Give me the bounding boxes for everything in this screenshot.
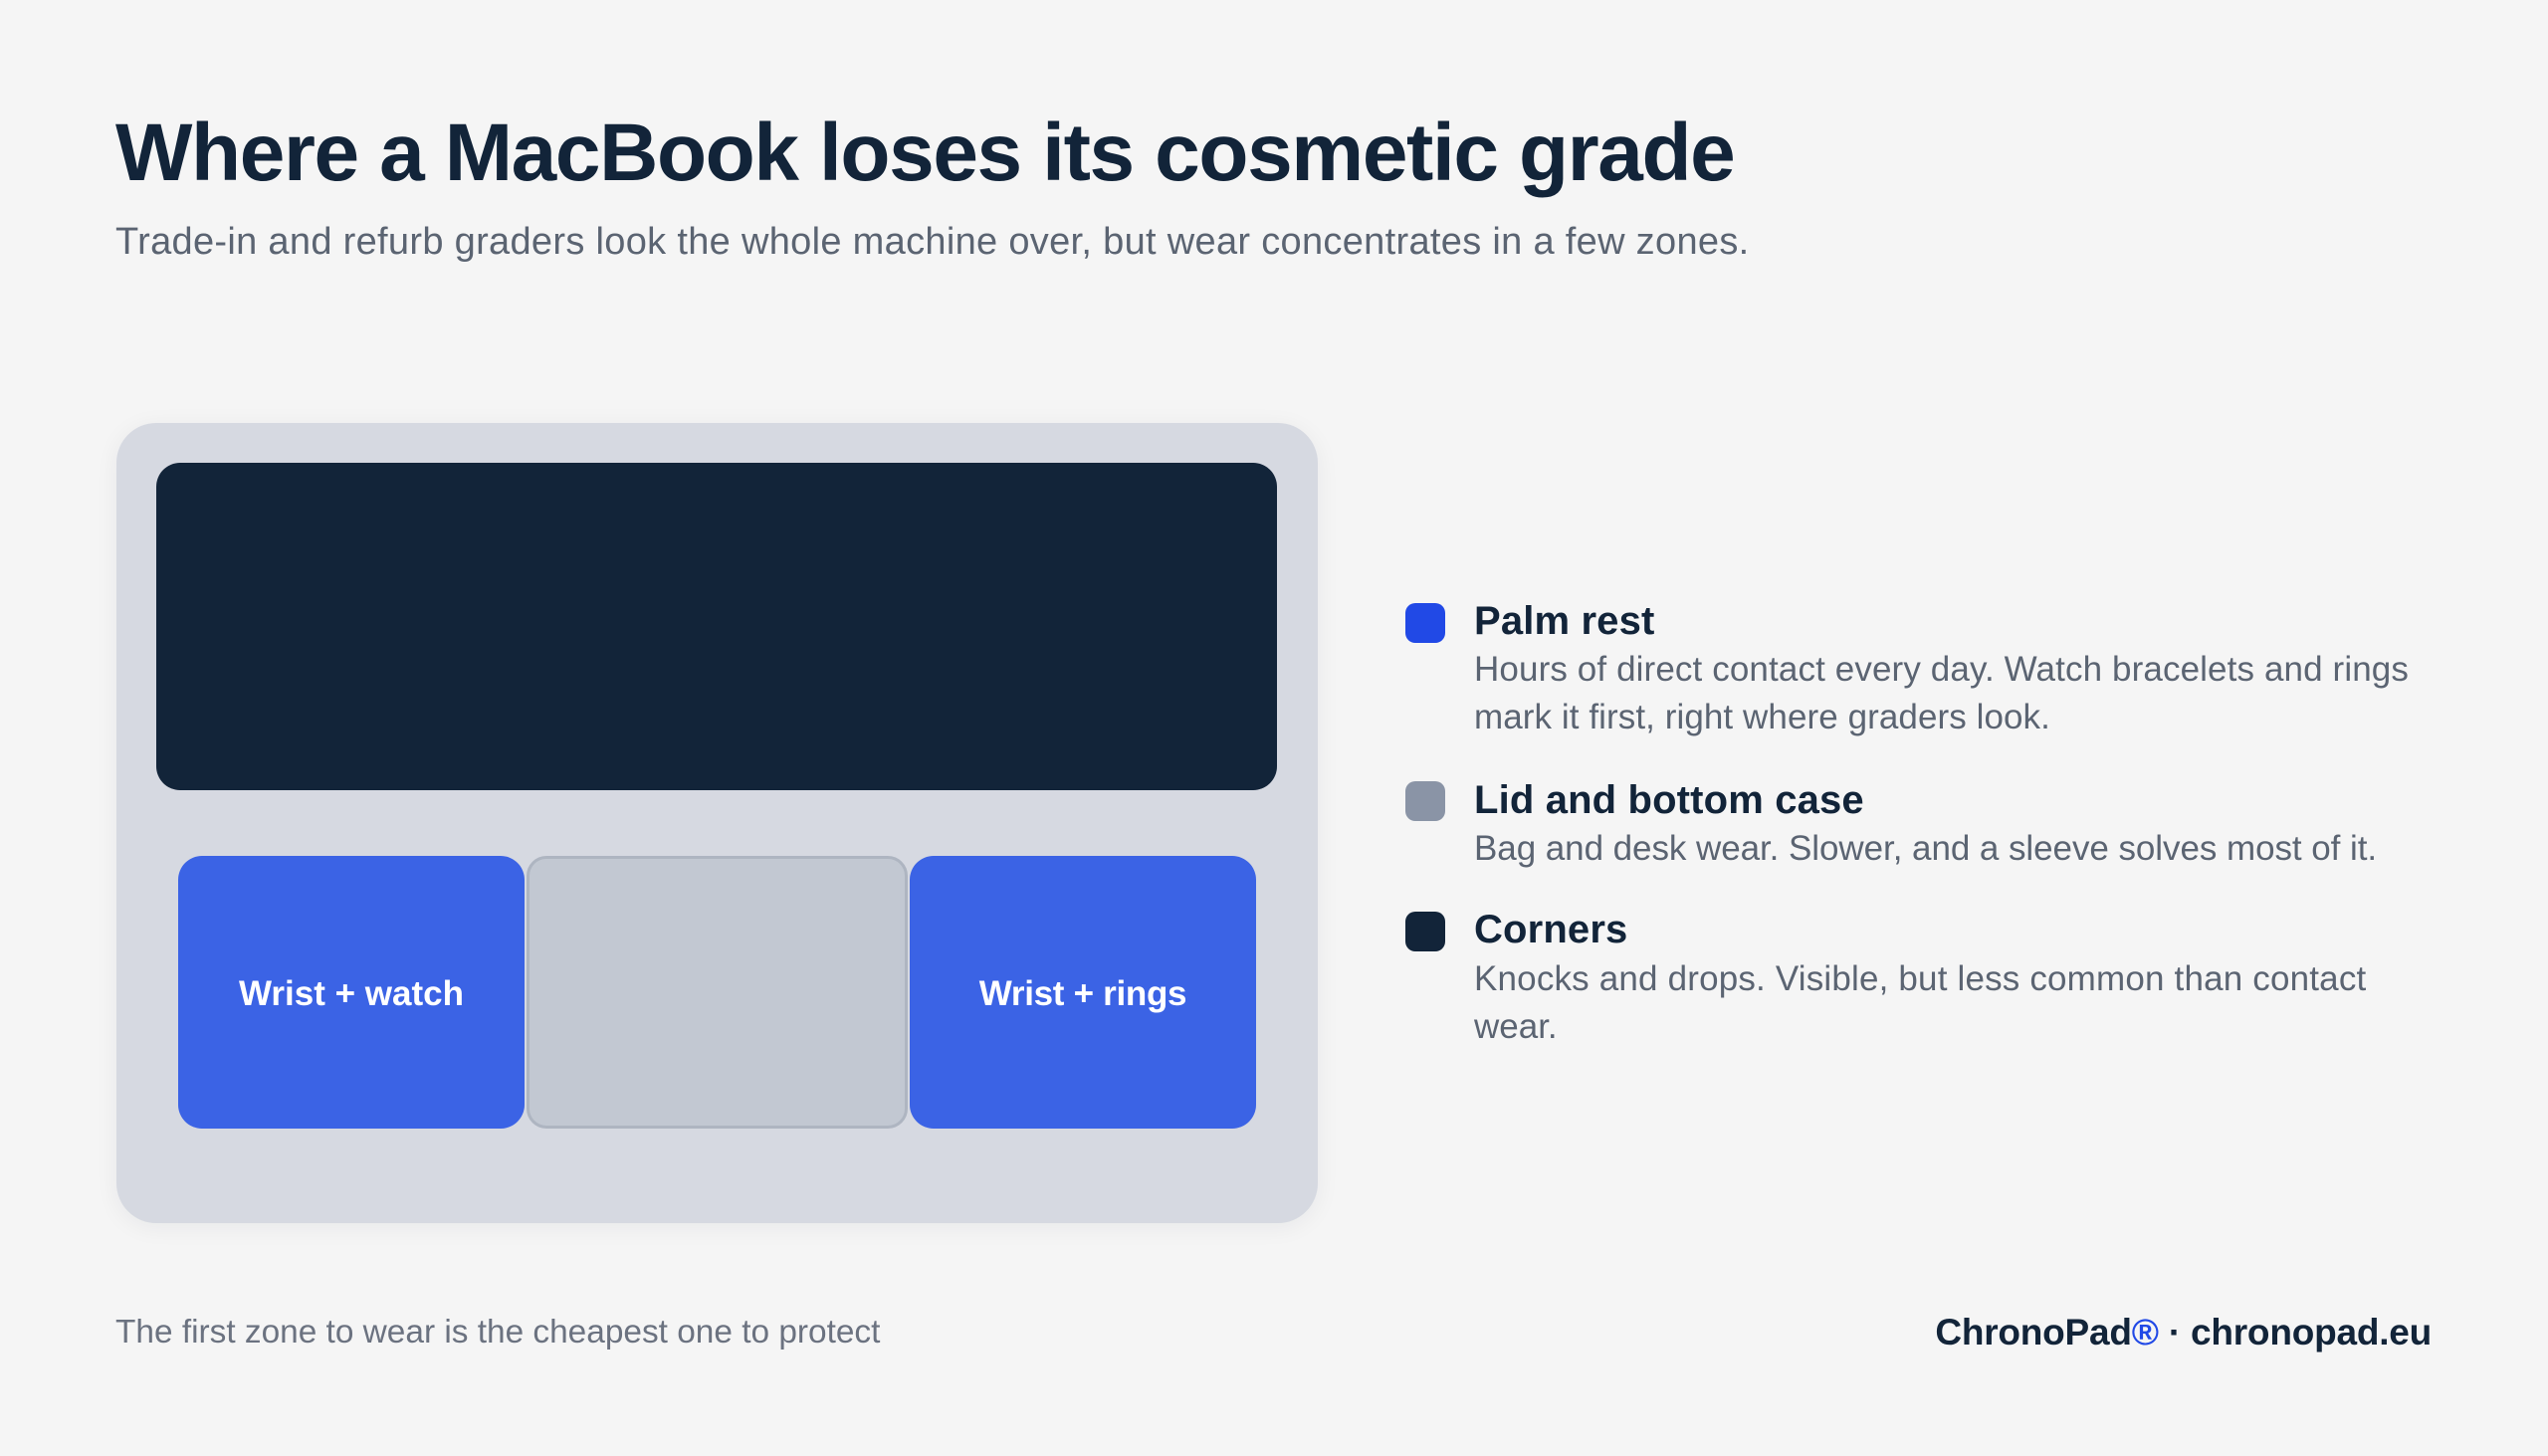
legend icon: lid and bottom case swatch [1405, 781, 1445, 821]
legend text: corners [1474, 959, 2366, 1046]
legend text: corners: Knocks and drops. Visible, but less common than contact [1474, 959, 2366, 998]
legend heading: corners: Corners [1474, 908, 1627, 951]
legend heading: lid and bottom case: Lid and bottom case [1474, 778, 1864, 822]
title: Where a MacBook loses its cosmetic grade [115, 107, 1734, 198]
left palm rest zone: wrist + watch [178, 856, 525, 1129]
legend text: palm rest: Hours of direct contact every day. Watch bracelets and rings [1474, 650, 2409, 689]
footer note: The first zone to wear is the cheapest one to protect [115, 1314, 880, 1351]
left palm rest zone: wrist + watch: Wrist + watch [239, 974, 464, 1013]
screen zone [156, 463, 1277, 790]
right palm rest zone: wrist + rings [910, 856, 1256, 1129]
legend text: palm rest [1474, 650, 2409, 736]
subtitle: Trade-in and refurb graders look the whole machine over, but wear concentrates in a few zones. [115, 221, 1750, 263]
legend text: corners: wear. [1474, 1007, 1558, 1046]
legend icon: corners swatch [1405, 912, 1445, 951]
right palm rest zone: wrist + rings: Wrist + rings [979, 974, 1186, 1013]
trackpad [527, 856, 908, 1129]
brand line: ChronoPad® · chronopad.eu [1935, 1312, 2432, 1352]
legend text: palm rest: mark it first, right where graders look. [1474, 698, 2050, 736]
panel: laptop diagram [116, 423, 1318, 1223]
legend heading: palm rest: Palm rest [1474, 599, 1654, 643]
legend text: lid and bottom case: Bag and desk wear. Slower, and a sleeve solves most of it. [1474, 829, 2377, 868]
legend icon: palm rest swatch [1405, 603, 1445, 643]
